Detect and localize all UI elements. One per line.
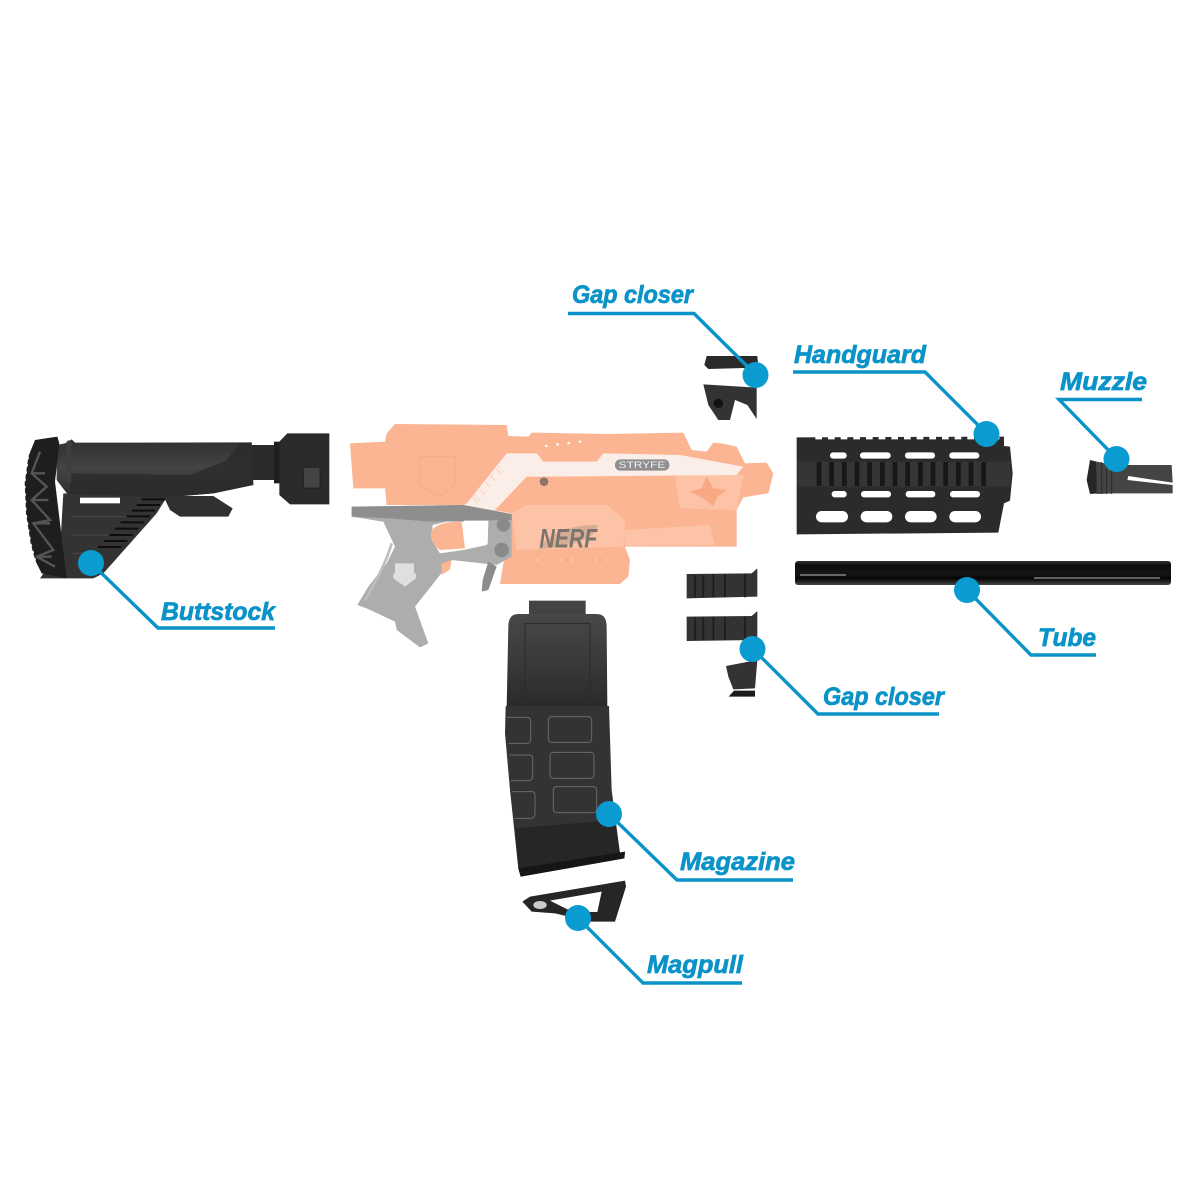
handguard top teeth	[815, 426, 1000, 446]
shell shading	[512, 475, 743, 550]
grip small orange tab	[442, 560, 452, 575]
vertical ridge	[62, 443, 76, 481]
callout: Magazine: Magazine	[680, 848, 795, 876]
dots row	[525, 557, 613, 562]
stud	[540, 477, 548, 486]
stryfe badge: STRYFE	[619, 460, 665, 470]
bracket hole	[714, 399, 723, 408]
callout: Magpull	[565, 905, 744, 983]
grey grip	[352, 505, 512, 647]
tube	[795, 561, 1171, 585]
callout: Muzzle	[1059, 368, 1147, 472]
gap closer top	[703, 356, 758, 420]
butt pad teeth	[24, 457, 35, 562]
stock panel lines	[72, 517, 127, 553]
nerf logo: NERF	[539, 523, 598, 553]
elite text: ELITE	[471, 465, 507, 505]
white stripe	[463, 453, 743, 512]
trigger orange insert	[431, 522, 465, 550]
rails and lower gap closer	[687, 568, 757, 697]
butt pad	[25, 437, 67, 578]
magazine upper inset	[525, 623, 590, 705]
magazine upper body	[507, 614, 607, 707]
magazine panels	[507, 717, 597, 818]
lower gap closer foot	[729, 691, 755, 697]
butt pad lattice	[32, 452, 55, 567]
callout: Gap closer top	[568, 281, 768, 388]
stock grip panel	[40, 493, 167, 578]
orange shell	[350, 424, 773, 584]
muzzle barrel	[1097, 462, 1173, 494]
stock window	[80, 498, 120, 503]
callout: Gap closer top: Gap closer	[572, 281, 694, 309]
magazine	[505, 601, 625, 877]
gap closer small bar	[704, 356, 758, 369]
lower gap closer block	[726, 660, 757, 689]
trigger window	[464, 521, 488, 549]
magazine top tab	[529, 601, 586, 615]
top rail ticks	[545, 441, 588, 446]
magazine bottom shade	[515, 820, 620, 868]
stock neck and end cap	[252, 433, 329, 504]
stock tube body	[57, 439, 253, 497]
rail ribs	[695, 574, 745, 640]
barrel cross mark	[690, 477, 727, 507]
callout: Gap closer lower	[740, 636, 945, 714]
handguard	[797, 436, 1013, 534]
callout: Magazine	[596, 801, 795, 880]
callout: Gap closer lower: Gap closer	[823, 683, 945, 711]
callout: Tube	[954, 577, 1096, 655]
blaster body	[350, 424, 773, 647]
gap closer bracket	[703, 384, 757, 420]
grip top strip	[352, 505, 512, 522]
magazine lower body	[505, 706, 625, 877]
rail one	[687, 568, 757, 598]
muzzle flange	[1087, 460, 1097, 494]
grip badge	[393, 563, 416, 587]
magpull ring hole	[533, 901, 547, 909]
shield emboss	[420, 457, 455, 497]
callout: Buttstock	[78, 550, 276, 628]
handguard body	[797, 437, 1013, 534]
stock grip ribs	[98, 499, 165, 547]
magpull	[522, 881, 626, 922]
magazine base lip	[518, 852, 625, 877]
stock rail lever	[163, 496, 233, 517]
grip dark pins	[494, 518, 510, 557]
muzzle collar threads	[1102, 462, 1112, 494]
handguard rail ribs	[817, 438, 987, 510]
muzzle	[1087, 460, 1173, 494]
callout: Handguard	[793, 341, 1000, 447]
callout: Handguard: Handguard	[794, 341, 927, 369]
callout: Muzzle: Muzzle	[1060, 368, 1147, 396]
stock lower shading	[70, 442, 253, 497]
trigger	[482, 562, 497, 592]
handguard slots	[816, 452, 981, 522]
handguard centre rail	[797, 462, 1011, 487]
stryfe badge	[615, 459, 669, 471]
buttstock	[24, 433, 329, 578]
callout: Buttstock: Buttstock	[161, 598, 276, 626]
callout: Tube: Tube	[1038, 624, 1096, 652]
rail two	[687, 611, 757, 641]
callout: Magpull: Magpull	[647, 951, 744, 979]
grip texture	[365, 543, 392, 600]
